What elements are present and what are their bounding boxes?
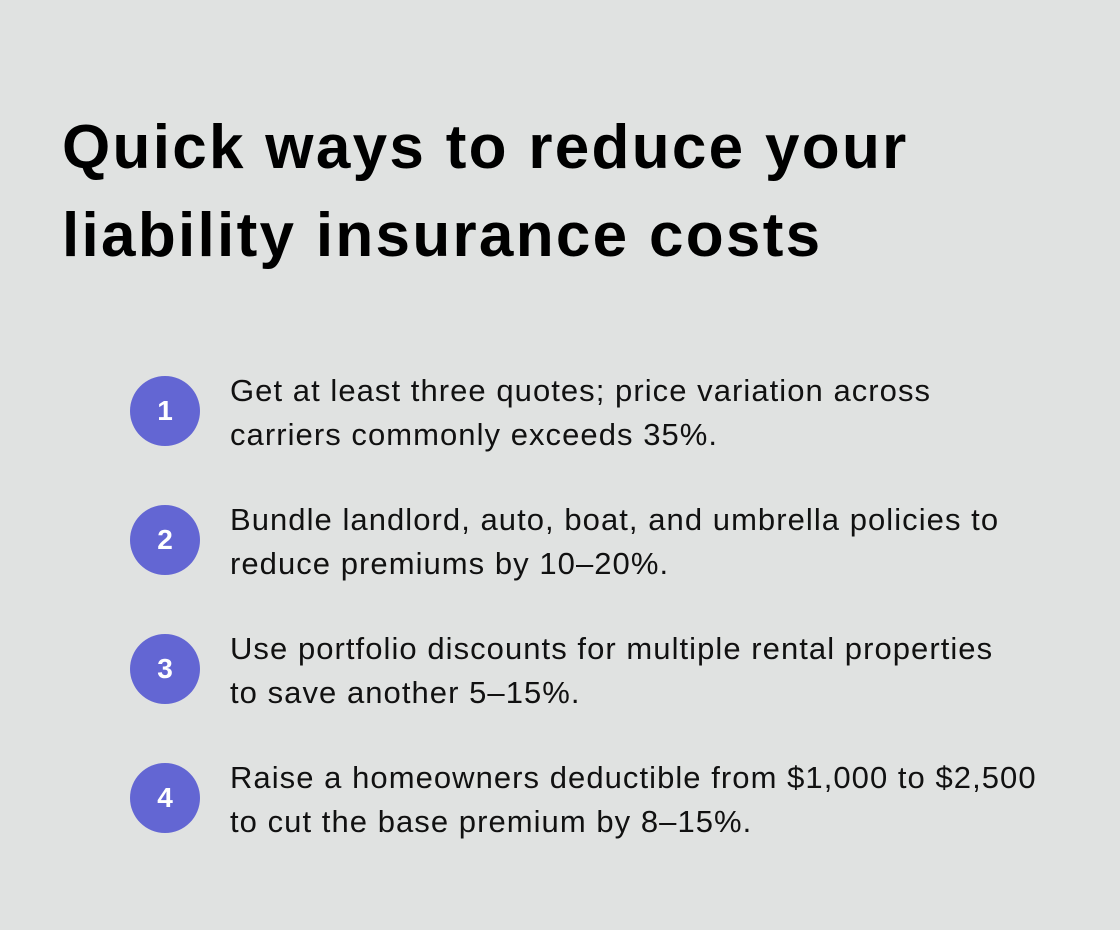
text 3: Use portfolio discounts for multiple rental properties bbox=[230, 631, 993, 666]
icon: number 2 bbox=[130, 505, 200, 575]
text 3 bbox=[230, 631, 993, 710]
text 4 bbox=[230, 760, 1037, 839]
icon: number 3: 3 bbox=[157, 653, 173, 684]
text 1: carriers commonly exceeds 35%. bbox=[230, 417, 718, 452]
text 3: to save another 5–15%. bbox=[230, 675, 581, 710]
text 2: reduce premiums by 10–20%. bbox=[230, 546, 669, 581]
icon: number 4 bbox=[130, 763, 200, 833]
text 4: to cut the base premium by 8–15%. bbox=[230, 804, 752, 839]
title: liability insurance costs bbox=[62, 201, 822, 270]
icon: number 3 bbox=[130, 634, 200, 704]
item 2 bbox=[130, 502, 999, 581]
text 4: Raise a homeowners deductible from $1,000 to $2,500 bbox=[230, 760, 1037, 795]
icon: number 1 bbox=[130, 376, 200, 446]
item 3 bbox=[130, 631, 993, 710]
text 2: Bundle landlord, auto, boat, and umbrella policies to bbox=[230, 502, 999, 537]
icon: number 4: 4 bbox=[157, 782, 173, 813]
icon: number 1: 1 bbox=[157, 395, 173, 426]
title bbox=[62, 113, 909, 270]
title: Quick ways to reduce your bbox=[62, 113, 909, 182]
item 4 bbox=[130, 760, 1037, 839]
text 1 bbox=[230, 373, 931, 452]
text 1: Get at least three quotes; price variation across bbox=[230, 373, 931, 408]
text 2 bbox=[230, 502, 999, 581]
icon: number 2: 2 bbox=[157, 524, 173, 555]
item 1 bbox=[130, 373, 931, 452]
